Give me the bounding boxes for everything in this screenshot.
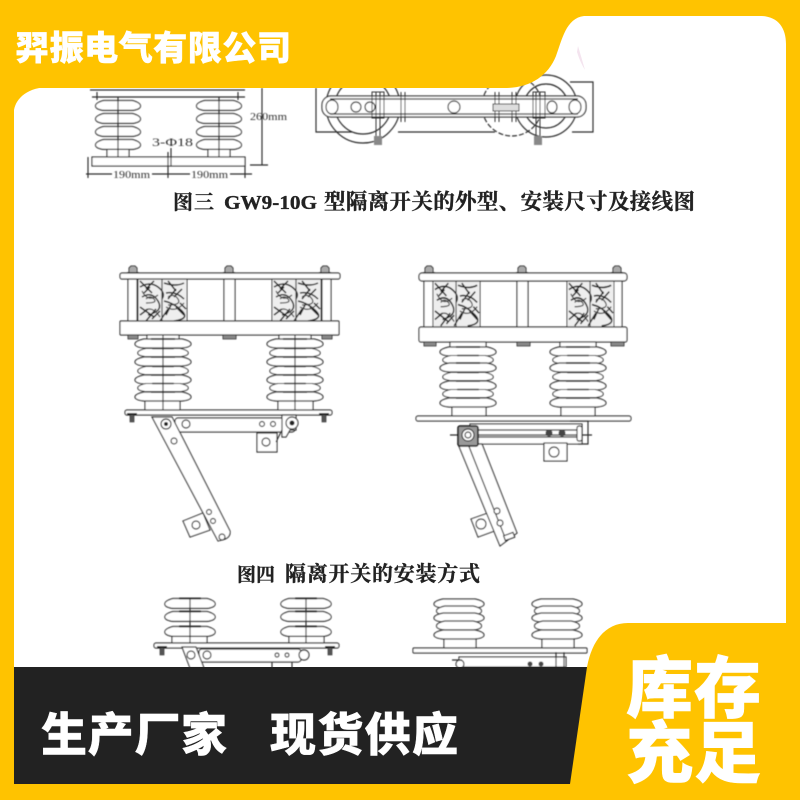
diagram: figure four, left isolator xyxy=(120,266,340,541)
top frame xyxy=(120,266,340,339)
caption: figure four: 图四 xyxy=(237,564,275,586)
caption: figure three xyxy=(173,189,695,214)
mounting plate and rail xyxy=(125,410,332,452)
company name: 羿振电气有限公司 xyxy=(15,30,291,68)
smudge mark xyxy=(577,46,585,70)
slogan text: 生产厂家 xyxy=(41,709,227,761)
yellow stock badge xyxy=(570,623,800,800)
insulator pair xyxy=(96,97,242,157)
swing arm xyxy=(152,417,230,541)
stock badge text xyxy=(626,652,761,792)
insulators xyxy=(440,342,606,416)
slogan text xyxy=(41,709,458,761)
swing arm xyxy=(458,426,517,546)
slogan text: 现货供应 xyxy=(270,709,458,761)
diagram: figure three, top view xyxy=(316,69,593,145)
dimension: 260mm: 260mm xyxy=(250,111,287,123)
mounting plate and rail xyxy=(416,416,631,461)
dimension: right 190mm: 190mm xyxy=(191,169,228,181)
caption: figure three: GW9-10G xyxy=(224,192,317,214)
diagram: partial isolator, lower right xyxy=(413,599,587,668)
stock badge text: 库存 xyxy=(626,652,761,727)
stock badge text: 充足 xyxy=(626,717,761,792)
caption: figure three: 图三 xyxy=(173,191,214,214)
dark slogan bar xyxy=(14,667,592,784)
dimension: 3-Φ18: 3-Φ18 xyxy=(152,135,193,149)
yellow header band xyxy=(0,0,640,88)
diagram: figure four, right isolator xyxy=(416,266,631,546)
insulators xyxy=(135,335,323,411)
diagram: partial isolator, lower left xyxy=(154,598,339,668)
diagram: figure three, side view xyxy=(86,88,287,181)
top frame xyxy=(419,266,627,346)
dimension: left 190mm: 190mm xyxy=(113,169,150,181)
caption: figure three: 型隔离开关的外型、安装尺寸及接线图 xyxy=(324,189,695,214)
caption: figure four: 隔离开关的安装方式 xyxy=(285,562,480,586)
